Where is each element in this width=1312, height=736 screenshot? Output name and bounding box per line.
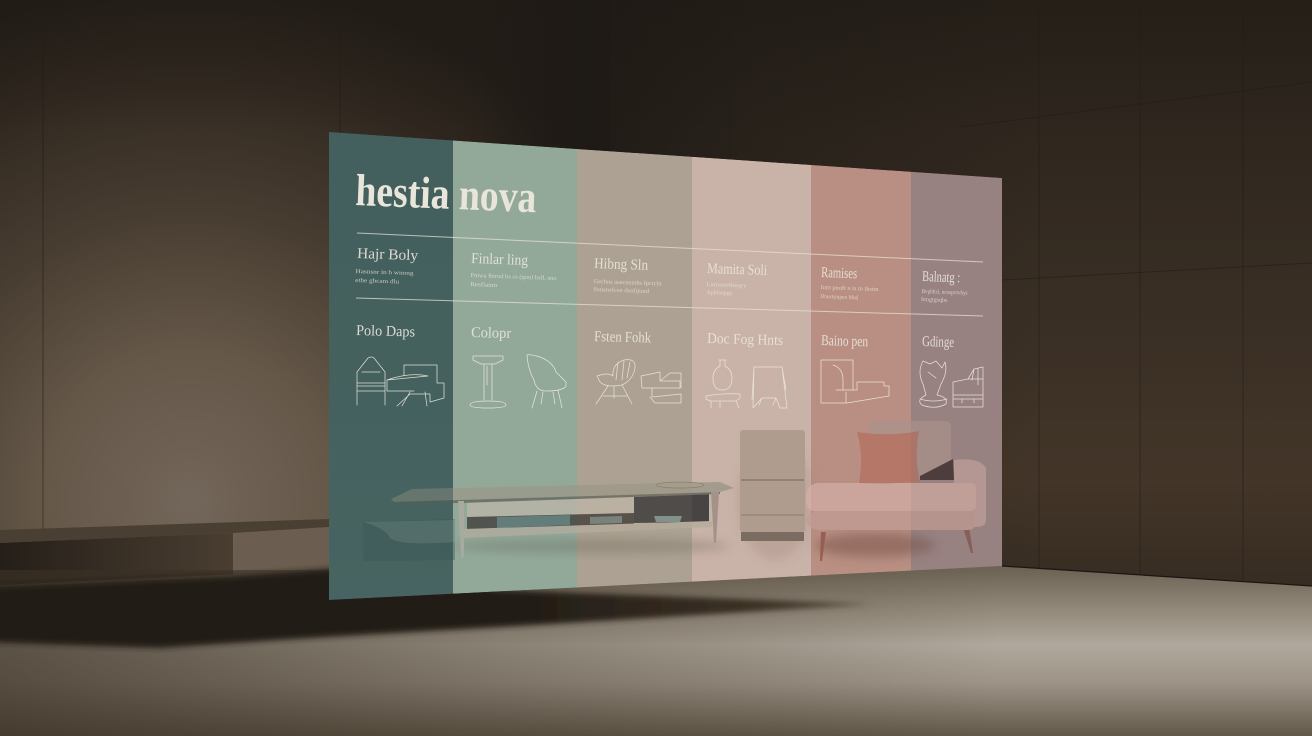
icon: lounge chair bbox=[527, 355, 566, 408]
low table bbox=[363, 482, 734, 557]
icon: vase on table bbox=[706, 360, 740, 408]
icon: modular sofa bbox=[821, 360, 889, 403]
line icons bbox=[357, 355, 983, 408]
column 2 sage bbox=[453, 140, 577, 594]
icon: chair and table set bbox=[357, 357, 444, 406]
floor left shade bbox=[0, 570, 1000, 736]
floor bbox=[0, 566, 1312, 736]
column 4 text: Mamita Soli bbox=[707, 261, 767, 279]
column 4 text: Aphtsepgs bbox=[706, 290, 733, 297]
column 6 text: Bvphltsl, ncnsprnvhys bbox=[922, 289, 968, 297]
column 5 text: Dnustsmpen Mad bbox=[820, 294, 858, 301]
icon: woven armchair bbox=[596, 360, 635, 404]
heading 3: Fsten Fohk bbox=[594, 329, 652, 347]
panel: colour columns bbox=[329, 132, 1002, 600]
column 3 text: Ssnsnsfcse dsnhjund bbox=[593, 286, 649, 295]
soft shadow bbox=[450, 539, 730, 553]
heading 5: Baino pen bbox=[821, 333, 869, 350]
column 3 text bbox=[593, 256, 662, 295]
heading 2: Colopr bbox=[471, 325, 511, 342]
column 3 text: Gechns asecnetnhs fpctcln bbox=[593, 278, 662, 287]
column 3 text: Hibng Sln bbox=[594, 256, 649, 274]
column 3 taupe bbox=[577, 149, 692, 588]
centre wall shade bbox=[480, 0, 1040, 600]
column 1 text: Hajr Boly bbox=[357, 246, 419, 264]
column 4 blush bbox=[692, 157, 811, 582]
column 4 text bbox=[706, 261, 767, 298]
column 6 text: bmgtgsqbs bbox=[921, 297, 948, 304]
column 1 text: Hasnsnr in b wnong bbox=[355, 269, 414, 277]
left wall bbox=[0, 0, 620, 600]
heading 4: Doc Fog Hnts bbox=[707, 331, 783, 349]
icon: stacked blocks bbox=[641, 372, 681, 403]
heading 1: Polo Daps bbox=[356, 323, 415, 341]
floor reflection bbox=[453, 519, 455, 560]
icon: sculptural vase bbox=[920, 361, 947, 407]
icon: side table bbox=[470, 356, 506, 408]
column tint overlays bbox=[329, 132, 1002, 600]
column 5 text: Ramises bbox=[821, 265, 858, 282]
icon: small armchair bbox=[953, 367, 983, 407]
column 2 text: Finlar ling bbox=[471, 251, 529, 269]
wall ledge bbox=[0, 519, 329, 590]
divider lines bbox=[356, 233, 983, 316]
column 6 text bbox=[921, 269, 969, 305]
column 4 text: Lamanvtheqry bbox=[706, 282, 747, 289]
ceiling shade bbox=[0, 0, 1312, 130]
column 6 mauve bbox=[911, 172, 1002, 571]
column 2 text: Resfianm bbox=[470, 281, 498, 289]
column 1 teal bbox=[329, 132, 453, 600]
title: hestia nova bbox=[355, 165, 537, 222]
column 2 text bbox=[470, 251, 557, 291]
sofa bbox=[806, 421, 986, 561]
column 5 terracotta bbox=[811, 165, 911, 576]
column 6 text: Balnatg : bbox=[922, 269, 960, 286]
row 2 headings bbox=[356, 323, 955, 351]
right wall bbox=[610, 0, 1312, 600]
column 1 text: ethe gbcam dlu bbox=[355, 278, 399, 285]
column 2 text: Pmwa lbtrnd bs cs (tpml bsfl, sno bbox=[470, 272, 557, 282]
furniture photo bbox=[363, 421, 986, 561]
column 5 text: Ium pnoft n is m thstm bbox=[821, 284, 879, 293]
column 5 text bbox=[820, 265, 880, 302]
row 1 headings and descriptions bbox=[355, 246, 969, 305]
column 1 text bbox=[355, 246, 419, 286]
icon: lounge chair square bbox=[752, 367, 787, 408]
wall floor seam bbox=[1002, 566, 1312, 586]
panel shadow on floor bbox=[0, 568, 872, 648]
cabinet bbox=[740, 430, 805, 541]
heading 6: Gdinge bbox=[922, 334, 955, 351]
